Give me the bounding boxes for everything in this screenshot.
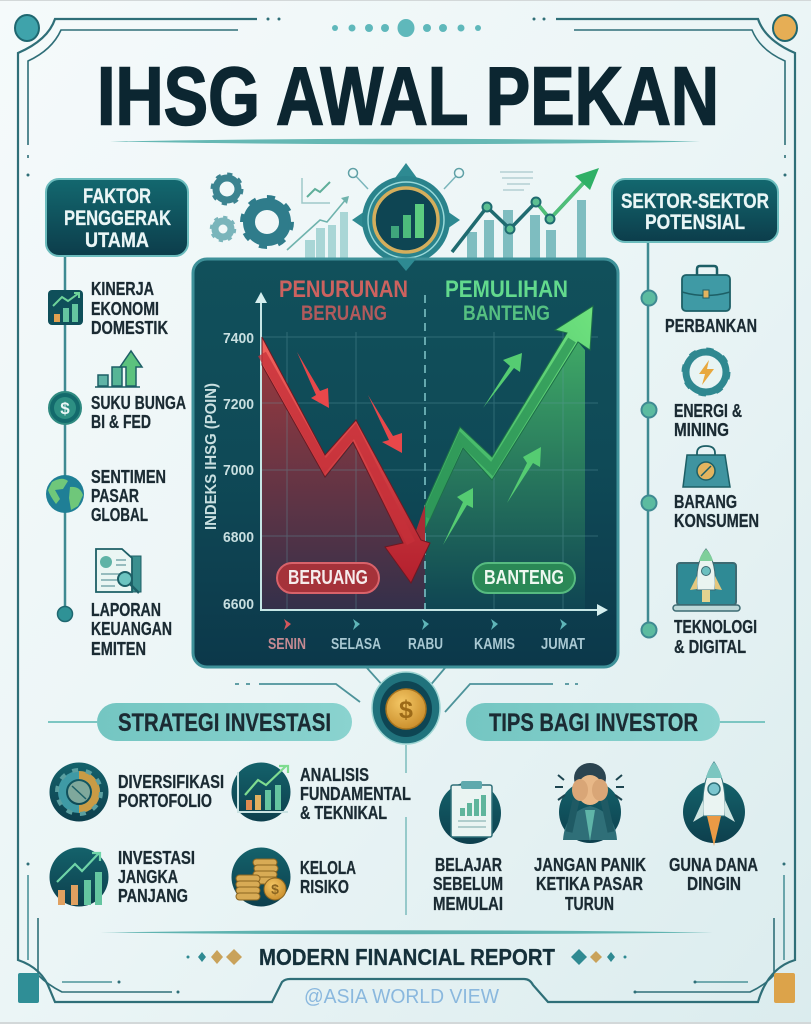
text: investasi jangka panjang: PANJANG [118,885,188,906]
footer rule [100,930,713,934]
pill: beruang: BERUANG [288,566,368,589]
decorative chart and gear icon cluster [212,163,599,271]
text: teknologi & digital: TEKNOLOGI [674,616,757,637]
text: energi & mining [674,400,742,440]
section divider [405,745,407,915]
heading: strategi investasi: STRATEGI INVESTASI [118,709,331,737]
heading: faktor penggerak utama: FAKTOR [83,184,151,208]
text: kelola risiko [300,857,356,897]
y axis labels: 6600 [223,596,254,613]
x axis day labels: KAMIS [474,636,515,653]
icon: growth chart [48,290,83,325]
text: suku bunga bi & fed: BI & FED [91,411,151,432]
panel: strategi investasi [48,703,411,906]
text: diversifikasi portofolio: PORTOFOLIO [118,790,212,811]
axes [255,292,608,616]
icon: report with magnifier [96,549,141,593]
text: jangan panik ketika pasar turun: JANGAN PANIK [534,854,647,875]
footer title: MODERN FINANCIAL REPORT [259,944,555,970]
icon: briefcase [682,266,730,311]
text: energi & mining: ENERGI & [674,400,742,421]
timeline dot [58,606,72,622]
red decline arrow [262,337,430,583]
pill: banteng: BANTENG [484,566,564,589]
icon: coin stacks: $ [271,881,279,897]
red small arrows [297,352,402,453]
icon: rising bars with arrow [95,351,142,387]
text: guna dana dingin: GUNA DANA [669,854,758,875]
panel: sektor-sektor potensial [612,179,778,657]
text: sentimen pasar global [91,466,166,525]
text: suku bunga bi & fed [91,392,186,432]
text: sentimen pasar global: GLOBAL [91,504,148,525]
red overlap wedge [410,505,425,548]
text: laporan keuangan emiten [91,599,172,659]
text: laporan keuangan emiten: LAPORAN [91,599,161,620]
green recovery arrow [425,306,593,530]
medallion pointer [396,259,416,271]
text: laporan keuangan emiten: EMITEN [91,638,146,659]
text: kinerja ekonomi domestik: DOMESTIK [91,317,169,338]
text: investasi jangka panjang: JANGKA [118,866,178,887]
text: energi & mining: MINING [674,419,729,440]
text lines ornament [500,172,533,190]
text: perbankan: PERBANKAN [665,315,757,336]
heading: pemulihan banteng: BANTENG [463,301,550,325]
icon: coin stacks [232,848,290,906]
text: diversifikasi portofolio [118,771,224,811]
x axis day markers [284,619,567,630]
icon: diversification gear [50,762,108,822]
x axis day labels [268,636,585,653]
icon: gears [212,174,292,246]
text: laporan keuangan emiten: KEUANGAN [91,618,172,639]
small line chart left [287,178,349,258]
text: jangan panik ketika pasar turun: KETIKA PASAR [536,873,643,894]
text: analisis fundamental & teknikal: ANALISIS [300,764,369,785]
icon: energy gear [684,350,728,394]
footer diamonds right [571,949,626,965]
text: belajar sebelum memulai: MEMULAI [433,893,503,914]
text: analisis fundamental & teknikal [300,764,411,823]
divider [424,295,426,610]
footer diamonds left [186,949,242,965]
panel: tips bagi investor [433,703,765,914]
heading: sektor-sektor potensial [612,179,778,242]
x axis day labels: SELASA [331,636,381,653]
y axis title: INDEKS IHSG (POIN) [203,383,220,530]
icon: dollar coin [49,392,81,424]
heading: tips bagi investor [466,703,765,741]
y axis labels [223,330,254,613]
watermark: @ASIA WORLD VIEW [304,986,499,1008]
text: kinerja ekonomi domestik [91,278,169,338]
heading: sektor-sektor potensial: POTENSIAL [645,210,745,234]
heading: faktor penggerak utama: UTAMA [85,228,149,252]
heading: penurunan beruang: BERUANG [301,301,387,325]
x axis day labels: JUMAT [541,636,585,653]
heading: pemulihan banteng [445,276,568,325]
heading: pemulihan banteng: PEMULIHAN [445,276,568,303]
heading: penurunan beruang [279,276,408,325]
red fill area [262,365,425,610]
text: barang konsumen: KONSUMEN [674,510,759,531]
text: barang konsumen: BARANG [674,491,737,512]
text: belajar sebelum memulai: BELAJAR [435,854,502,875]
heading: tips bagi investor: TIPS BAGI INVESTOR [489,709,698,737]
y axis labels: 7400 [223,330,254,347]
text: investasi jangka panjang [118,847,195,906]
title underline [110,139,700,144]
panel: chart [193,259,618,667]
icon: globe [46,475,84,513]
text: suku bunga bi & fed: SUKU BUNGA [91,392,186,413]
text: sentimen pasar global: SENTIMEN [91,466,166,487]
icon: dollar coin: $ [60,399,70,418]
text: teknologi & digital: & DIGITAL [674,636,746,657]
text: jangan panik ketika pasar turun: TURUN [565,893,614,914]
text: guna dana dingin: DINGIN [687,873,741,894]
y axis labels: 7200 [223,396,254,413]
x axis day labels: SENIN [268,636,306,653]
y axis labels: 7000 [223,462,254,479]
pill: banteng [473,563,575,593]
icon: rocket [683,762,745,846]
heading: faktor penggerak utama [46,179,188,256]
icon: laptop with rocket [673,549,740,611]
timeline dots [642,290,656,638]
text: kelola risiko: RISIKO [300,876,349,897]
icon: panicked investor [555,763,624,843]
text: belajar sebelum memulai: SEBELUM [433,873,503,894]
medallion: gold coin [372,672,440,744]
icon: clipboard [439,781,501,844]
bars and rising line arrow [452,168,599,258]
green fill area [425,342,585,610]
x axis day labels: RABU [408,636,443,653]
text: sentimen pasar global: PASAR [91,485,139,506]
medallion: chart emblem [348,163,464,271]
grid [261,332,598,610]
text: analisis fundamental & teknikal: FUNDAMENTAL [300,783,411,804]
text: teknologi & digital [674,616,757,657]
icon: long-term investing chart [50,848,108,906]
heading: penurunan beruang: PENURUNAN [279,276,408,303]
text: kinerja ekonomi domestik: EKONOMI [91,298,159,319]
icon: analysis chart [232,762,290,822]
pill: beruang [277,563,379,593]
y axis labels: 6800 [223,529,254,546]
connector lines to coin medallion [235,668,578,712]
text: diversifikasi portofolio: DIVERSIFIKASI [118,771,224,792]
icon: shopping bag [683,446,730,487]
heading: sektor-sektor potensial: SEKTOR-SEKTOR [621,189,769,213]
medallion: gold coin: $ [399,696,413,724]
text: jangan panik ketika pasar turun [534,854,647,914]
text: kelola risiko: KELOLA [300,857,356,878]
text: barang konsumen [674,491,759,531]
text: guna dana dingin [669,854,758,894]
green small arrows [443,353,541,545]
text: analisis fundamental & teknikal: & TEKNIKAL [300,802,387,823]
heading: strategi investasi [48,703,352,741]
text: belajar sebelum memulai [433,854,503,914]
heading: faktor penggerak utama: PENGGERAK [64,206,171,230]
panel: faktor penggerak utama [46,179,188,659]
text: kinerja ekonomi domestik: KINERJA [91,278,154,299]
text: investasi jangka panjang: INVESTASI [118,847,195,868]
